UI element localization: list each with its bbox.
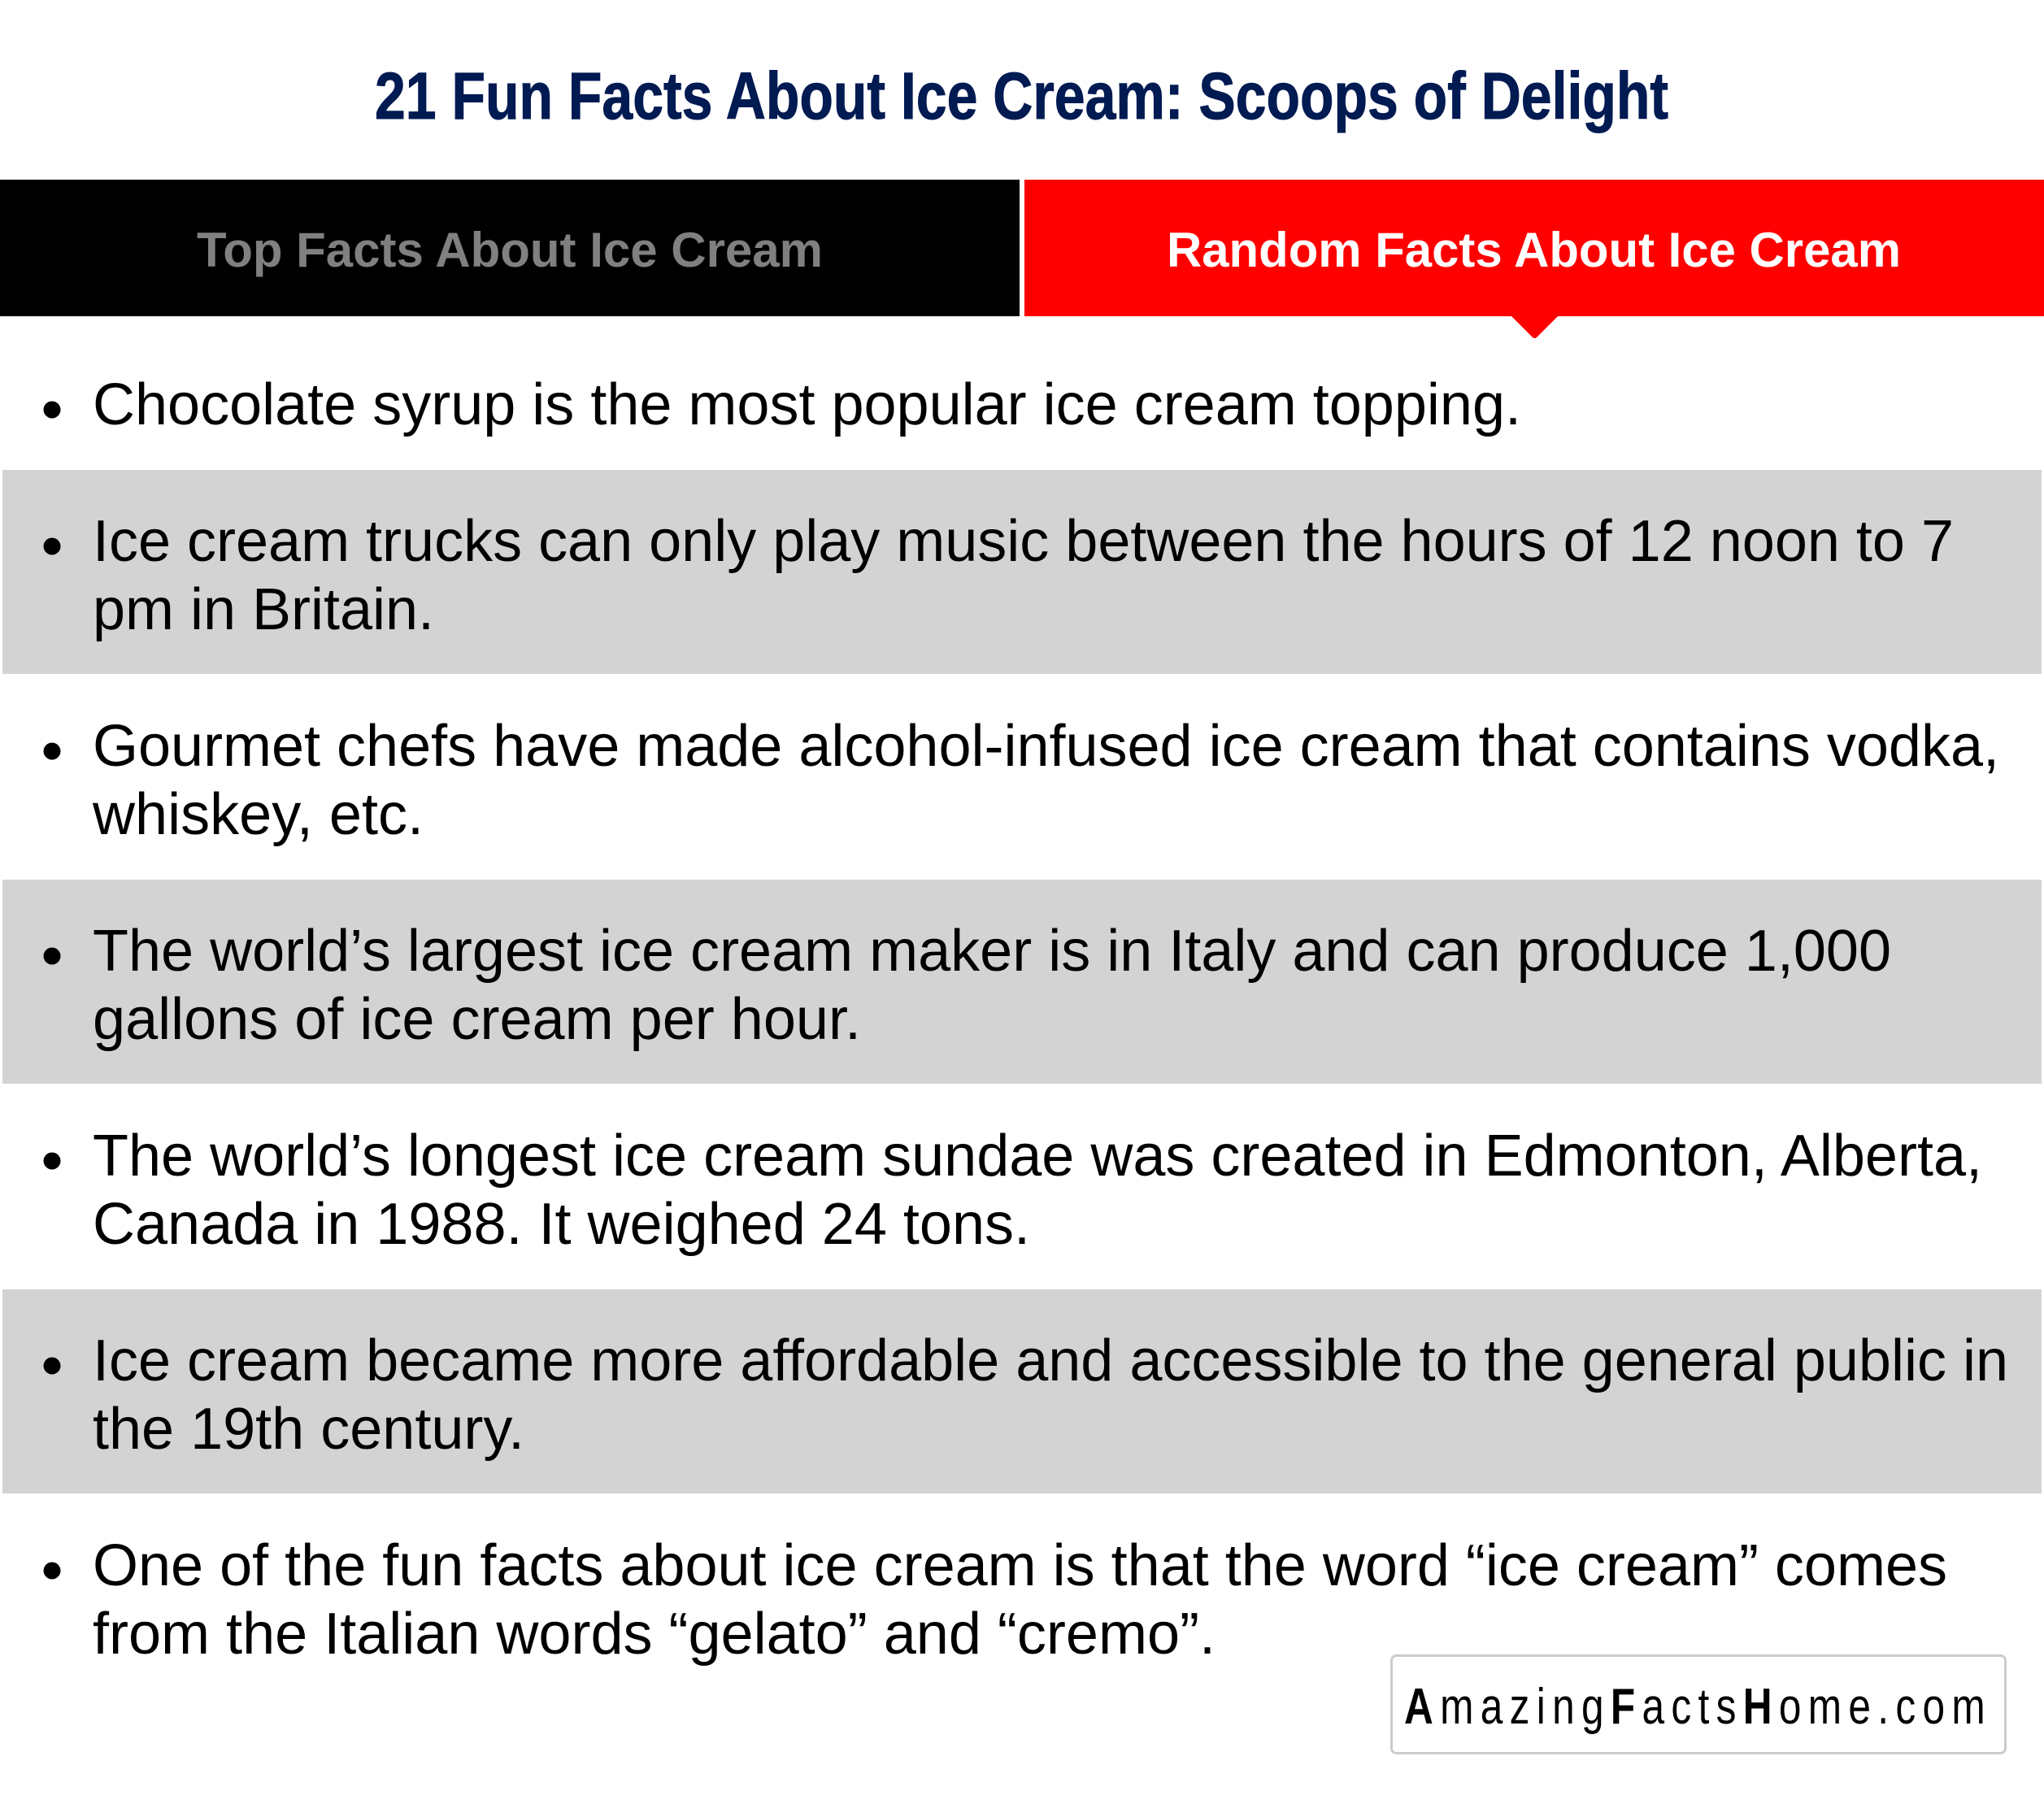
fact row 6: the 19th century.	[93, 1397, 524, 1462]
fact row 6: Ice cream became more affordable and accessible to the general public in	[93, 1328, 2008, 1393]
fact row 7: One of the fun facts about ice cream is that the word “ice cream” comes	[93, 1533, 1947, 1598]
fact row 3	[44, 714, 1999, 847]
fact list	[2, 372, 2042, 1667]
fact row 1: Chocolate syrup is the most popular ice cream topping.	[93, 372, 1521, 437]
tab bar	[0, 180, 2044, 338]
fact row 2: Ice cream trucks can only play music between the hours of 12 noon to 7	[93, 509, 1954, 574]
fact row 7: from the Italian words “gelato” and “cremo”.	[93, 1602, 1216, 1667]
fact row 3: Gourmet chefs have made alcohol-infused ice cream that contains vodka,	[93, 714, 1999, 779]
fact row 5: Canada in 1988. It weighed 24 tons.	[93, 1192, 1030, 1257]
fact row 2: pm in Britain.	[93, 577, 434, 642]
fact row 7	[44, 1533, 1947, 1667]
fact row 2	[2, 470, 2042, 674]
tab: random facts (active): Random Facts About Ice Cream	[1167, 223, 1901, 277]
fact row 4: The world’s largest ice cream maker is in Italy and can produce 1,000	[93, 919, 1891, 984]
title: 21 Fun Facts About Ice Cream: Scoops of Delight	[375, 59, 1668, 133]
watermark logo box: AmazingFactsHome.com	[1404, 1678, 1992, 1734]
fact row 4: gallons of ice cream per hour.	[93, 987, 861, 1052]
fact row 5	[44, 1124, 1982, 1257]
tab: random facts (active)	[1024, 180, 2044, 338]
fact row 4	[2, 880, 2042, 1084]
tab: top facts: Top Facts About Ice Cream	[197, 223, 823, 277]
tab: top facts	[0, 180, 1020, 316]
fact row 6	[2, 1289, 2042, 1493]
fact row 5: The world’s longest ice cream sundae was created in Edmonton, Alberta,	[93, 1124, 1982, 1189]
watermark logo box	[1392, 1655, 2005, 1753]
fact row 3: whiskey, etc.	[92, 782, 424, 847]
